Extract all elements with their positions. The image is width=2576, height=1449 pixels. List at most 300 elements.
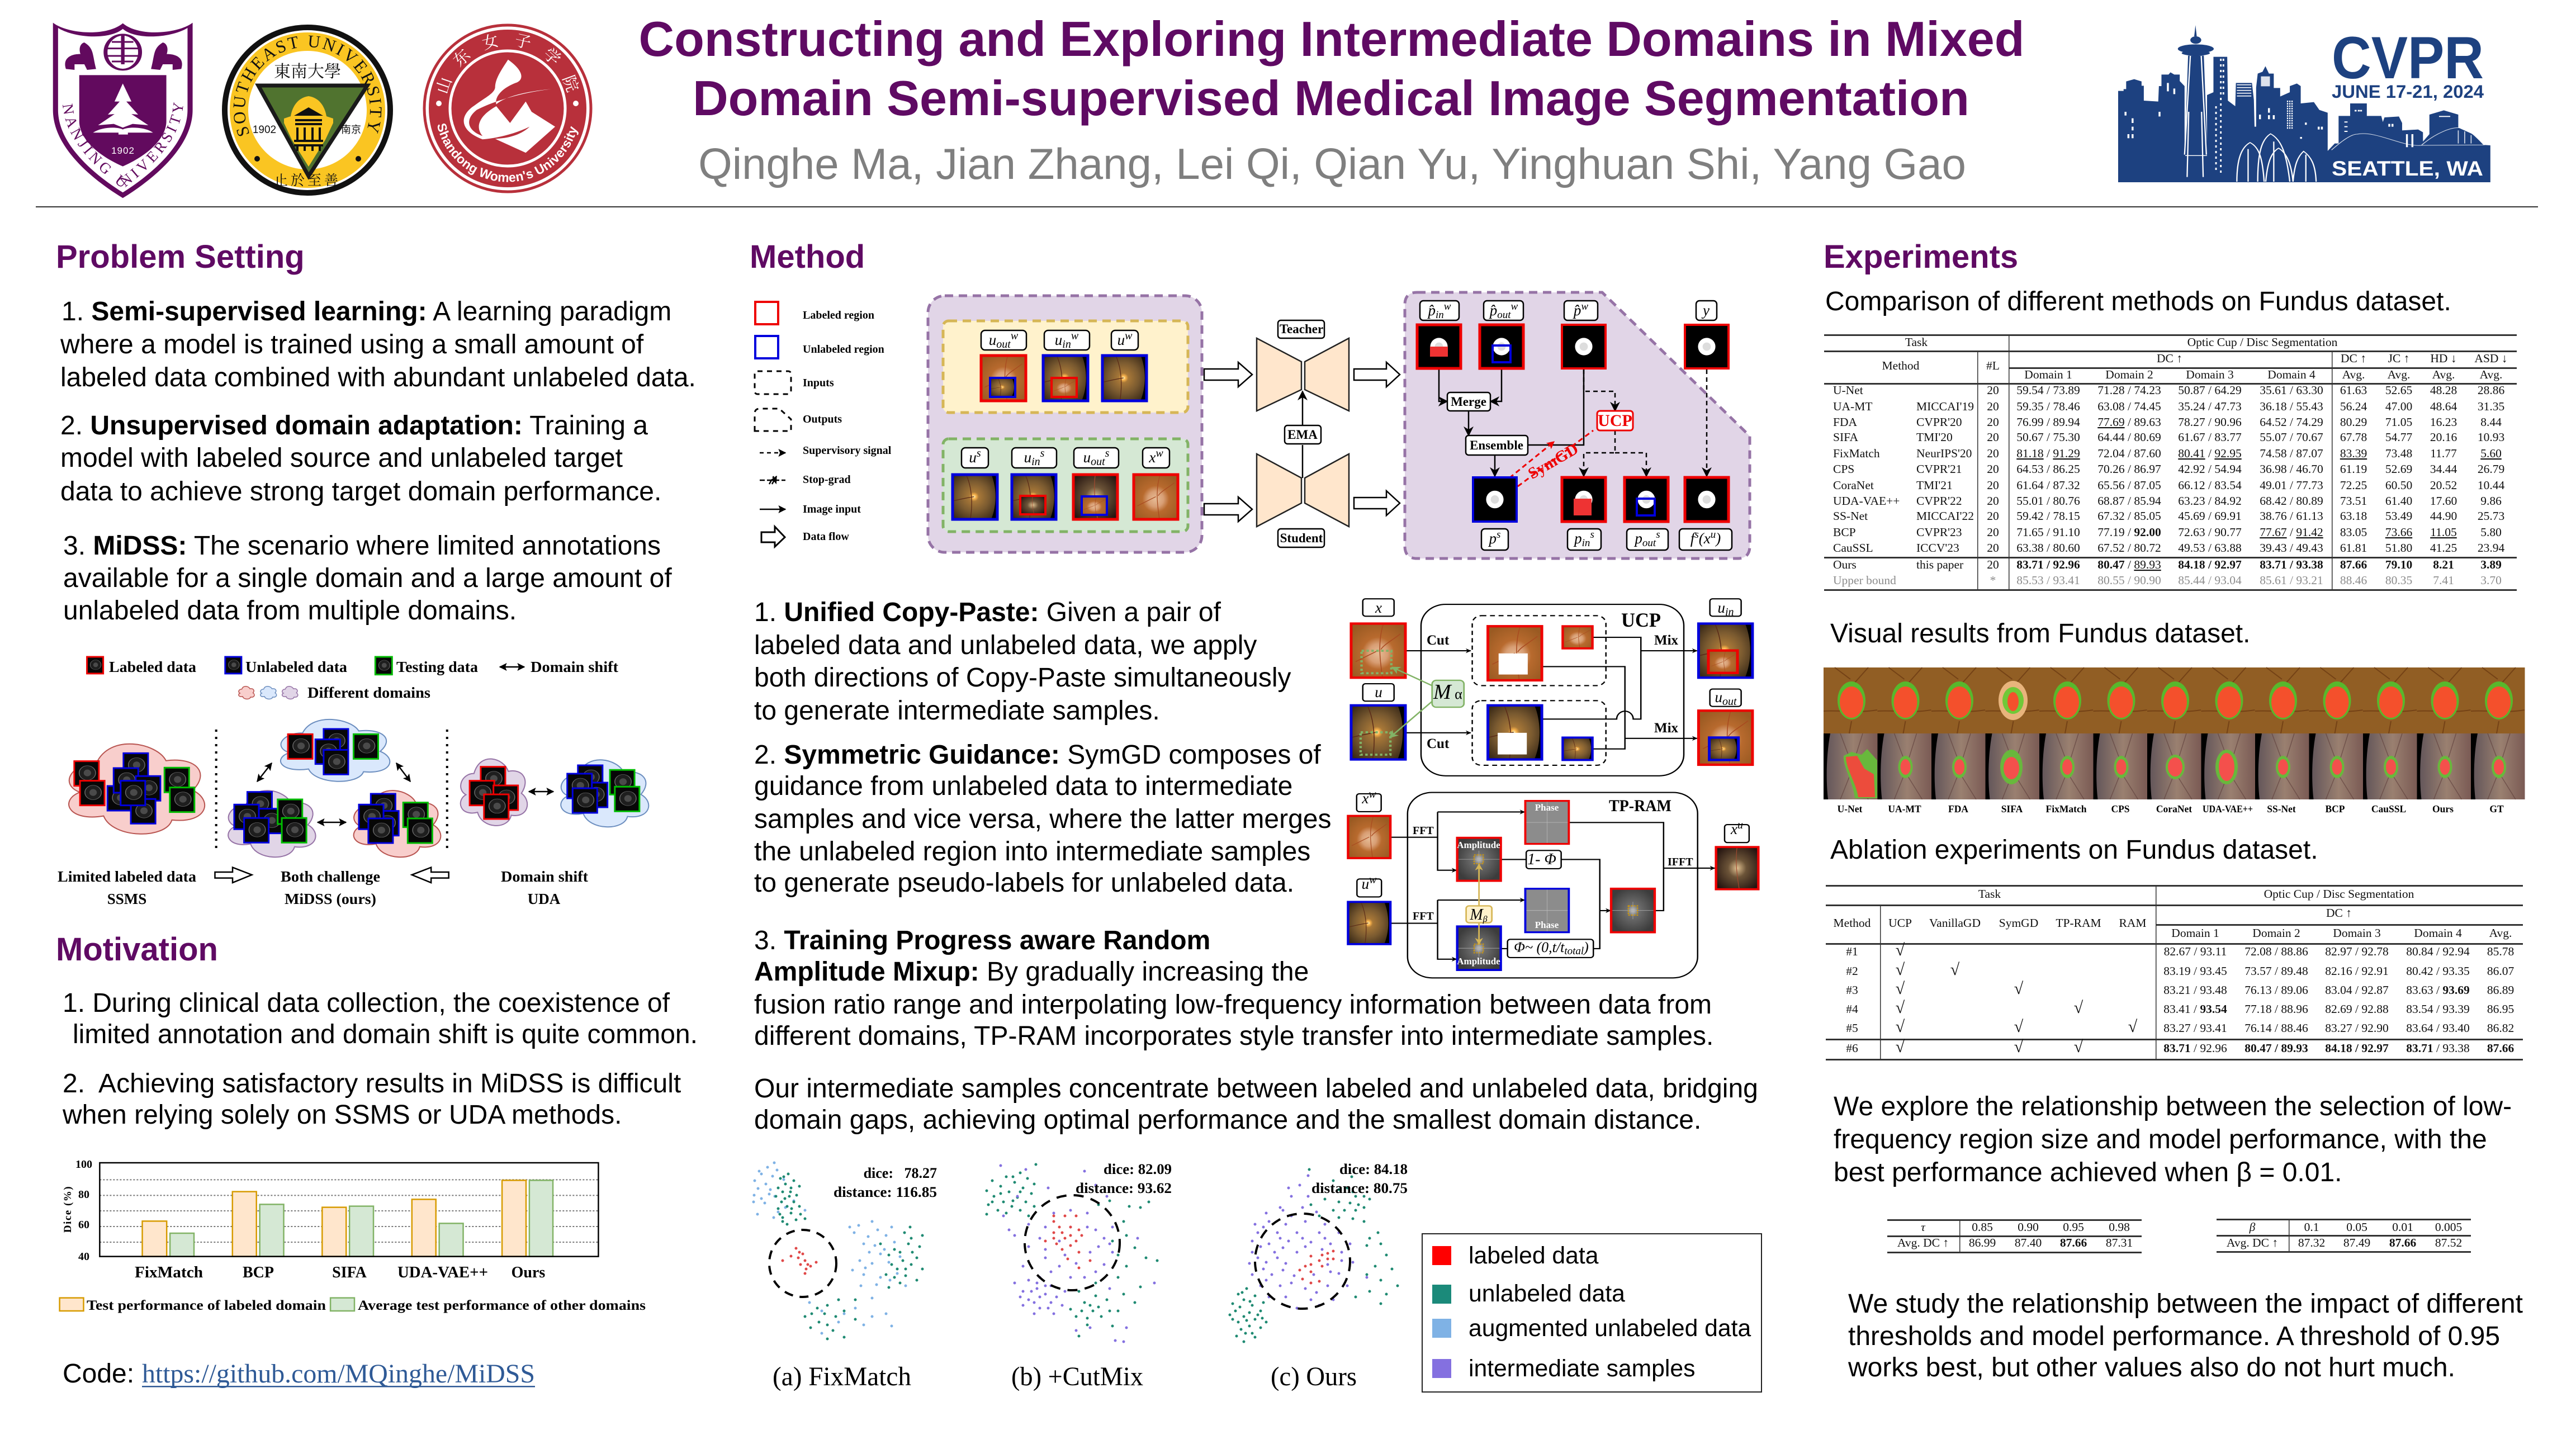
chart: t-SNE scatter plots: dice: 82.09 [1104, 1161, 1172, 1177]
title [639, 11, 2024, 126]
table: comparison of methods: 20 [1987, 400, 1999, 413]
diagram: TP-RAM: FFT [1413, 825, 1434, 837]
table: comparison of methods: 83.71 / 93.38 [2260, 558, 2323, 571]
text: intermediate samples summary: domain gaps, achieving optimal performance and the smallest domain distance. [754, 1105, 1701, 1135]
table: comparison of methods: 67.52 / 80.72 [2097, 541, 2161, 555]
logo: Shandong Women's University [423, 23, 593, 193]
bar chart: dice by method: Average test performance of other domains [358, 1298, 646, 1313]
captions: Limited labeled data [58, 868, 197, 885]
diagram: UCP: u [1717, 599, 1725, 616]
table: comparison of methods: 67.32 / 85.05 [2097, 509, 2161, 523]
legend: scatter [1422, 1234, 1761, 1392]
predictions bottom: ) [1715, 530, 1721, 547]
strong augmented images: u [969, 449, 977, 466]
table: comparison of methods: 10.44 [2478, 479, 2504, 492]
heading: Experiments: Experiments [1824, 239, 2018, 275]
table: comparison of methods: 80.41 / 92.95 [2178, 447, 2242, 460]
predictions top: p̂ [1490, 302, 1497, 319]
table: comparison of methods: 65.56 / 87.05 [2097, 479, 2161, 492]
table: comparison of methods: #L [1986, 359, 2000, 372]
table: comparison of methods: 70.26 / 86.97 [2097, 462, 2161, 476]
captions: MiDSS (ours) [285, 891, 376, 907]
table: comparison of methods: Upper bound [1833, 574, 1896, 587]
table: ablation experiments: √ [2014, 1038, 2024, 1056]
legend: data types: Different domains [307, 684, 430, 701]
legend: scatter: labeled data [1469, 1242, 1599, 1269]
table: comparison of methods: 49.53 / 63.88 [2178, 541, 2242, 555]
legend: method figure [755, 302, 892, 547]
table: comparison of methods: 48.64 [2430, 400, 2457, 413]
table: comparison of methods: CVPR'23 [1916, 525, 1962, 539]
bar chart: dice by method [60, 1158, 646, 1313]
diagram: UCP: Mix [1654, 633, 1679, 648]
diagram: TP-RAM: x [1362, 790, 1368, 807]
table: ablation experiments: RAM [2119, 916, 2146, 930]
table: comparison of methods: 11.77 [2430, 447, 2457, 460]
predictions bottom: p [1574, 530, 1582, 547]
table: ablation experiments: 83.19 / 93.45 [2163, 964, 2227, 978]
table: comparison of methods: CVPR'21 [1916, 462, 1962, 476]
predictions top: in [1436, 309, 1444, 321]
table: comparison of methods: 80.47 / 89.93 [2097, 558, 2161, 571]
text: MiDSS [63, 531, 672, 626]
table: comparison of methods: 8.44 [2480, 415, 2502, 429]
table: comparison of methods: 80.29 [2340, 415, 2367, 429]
table: comparison of methods: HD ↓ [2430, 352, 2457, 365]
table: comparison of methods: 20.52 [2430, 479, 2457, 492]
chart: t-SNE scatter plots [754, 1161, 1761, 1392]
table: beta sensitivity [2217, 1219, 2471, 1253]
scatter (a) FixMatch [754, 1163, 922, 1339]
diagram: TP-RAM: total [1564, 945, 1584, 957]
image strip: segmentation results: FixMatch [2046, 803, 2087, 815]
text: unsupervised domain adaptation: model with labeled source and unlabeled target [60, 443, 623, 473]
table: comparison of methods: 63.23 / 84.92 [2178, 494, 2242, 508]
table: comparison of methods: 20 [1987, 558, 1999, 571]
table: comparison of methods: 85.44 / 93.04 [2178, 574, 2242, 587]
table: ablation experiments: 73.57 / 89.48 [2244, 964, 2308, 978]
text: motivation points: 2. Achieving satisfactory results in MiDSS is difficult [63, 1069, 681, 1098]
domain shift arrows [257, 667, 553, 822]
table: comparison of methods: 52.69 [2385, 462, 2412, 476]
table: comparison of methods: 20 [1987, 383, 1999, 397]
text: TP-RAM [754, 926, 1713, 1051]
table: comparison of methods: NeurIPS'20 [1916, 447, 1972, 460]
table: comparison of methods: TMI'21 [1916, 479, 1953, 492]
teacher and student networks [1204, 320, 1400, 547]
text: unified copy-paste: labeled data and unlabeled data, we apply [754, 631, 1257, 660]
table: comparison of methods: ASD ↓ [2474, 352, 2508, 365]
table: beta sensitivity: 87.32 [2298, 1236, 2325, 1249]
table: comparison of methods: 31.35 [2478, 400, 2504, 413]
table: comparison of methods: 53.49 [2385, 509, 2412, 523]
diagram: TP-RAM: w [1369, 874, 1377, 886]
heading: Method: Method [750, 239, 865, 275]
weak augmented images: u [1055, 332, 1062, 348]
legend: data types: Domain shift [531, 659, 618, 675]
table: ablation experiments: √ [2074, 998, 2083, 1017]
table: comparison of methods: 36.98 / 46.70 [2260, 462, 2323, 476]
predictions bottom [1472, 476, 1732, 550]
table: comparison of methods: 59.42 / 78.15 [2016, 509, 2080, 523]
table: ablation experiments: Domain 1 [2171, 926, 2219, 940]
table: comparison of methods: FixMatch [1833, 447, 1880, 460]
strong augmented images: s [977, 447, 981, 460]
text: symmetric guidance: guidance from unlabeled data to intermediate [754, 771, 1292, 801]
text: symmetric guidance: to generate pseudo-labels for unlabeled data. [754, 868, 1294, 898]
diagram: TP-RAM: Amplitude [1457, 840, 1500, 850]
chart: t-SNE scatter plots: dice: 78.27 [864, 1165, 937, 1181]
table: ablation experiments: 86.07 [2487, 964, 2514, 978]
captions: UDA [528, 891, 561, 907]
merge, ensemble, UCP boxes: UCP [1598, 411, 1632, 430]
table: comparison of methods: 76.99 / 89.94 [2016, 415, 2080, 429]
table: comparison of methods: 20 [1987, 430, 1999, 444]
image strip: segmentation results: BCP [2326, 803, 2345, 815]
table: ablation experiments: √ [2014, 1017, 2024, 1036]
captions: SSMS [107, 891, 146, 907]
text: symmetric guidance: the unlabeled region into intermediate samples [754, 837, 1310, 866]
logo: Southeast University: 南京 [341, 122, 361, 136]
table: comparison of methods: 11.05 [2430, 525, 2457, 539]
table: tau sensitivity: 0.90 [2018, 1220, 2039, 1234]
text: unified copy-paste: to generate intermediate samples. [754, 696, 1160, 726]
diagram: TP-RAM: IFFT [1668, 856, 1693, 868]
table: comparison of methods: 20 [1987, 494, 1999, 508]
table: comparison of methods: 85.61 / 93.21 [2260, 574, 2323, 587]
captions: Domain shift [501, 868, 588, 885]
captions [58, 868, 588, 907]
image strip: segmentation results: SIFA [2001, 803, 2023, 815]
text: unified copy-paste [754, 598, 1291, 726]
image strip: segmentation results: CPS [2111, 803, 2130, 815]
diagram: UCP [1350, 599, 1754, 776]
diagram: UCP: in [1725, 606, 1734, 618]
table: comparison of methods: 23.94 [2478, 541, 2504, 555]
table: comparison of methods: 48.28 [2430, 383, 2457, 397]
table: comparison of methods: 61.81 [2340, 541, 2367, 555]
text: semi-supervised learning [60, 297, 696, 392]
table: ablation experiments: 86.89 [2487, 983, 2514, 997]
bar chart: dice by method: 40 [78, 1251, 89, 1263]
weak augmented images: out [996, 338, 1011, 351]
predictions top: p̂ [1574, 302, 1581, 319]
table: comparison of methods: 72.25 [2340, 479, 2367, 492]
table: tau sensitivity: 0.98 [2109, 1220, 2130, 1234]
table: ablation experiments: 82.69 / 92.88 [2325, 1002, 2389, 1016]
text: threshold relationship: We study the relationship between the impact of different [1848, 1289, 2523, 1319]
table: ablation experiments: 72.08 / 88.86 [2244, 945, 2308, 958]
table: comparison of methods: CVPR'22 [1916, 494, 1962, 508]
merge, ensemble, UCP boxes: Ensemble [1470, 438, 1523, 452]
text: TP-RAM: different domains, TP-RAM incorporates style transfer into intermediate samples. [754, 1021, 1713, 1051]
panel: motivation [56, 931, 698, 1389]
table: comparison of methods: * [1990, 574, 1996, 587]
table: ablation experiments: 83.04 / 92.87 [2325, 983, 2389, 997]
image strip: segmentation results: Ours [2432, 803, 2454, 815]
table: comparison of methods: 83.05 [2340, 525, 2367, 539]
teacher and student networks: EMA [1287, 428, 1318, 442]
table: comparison of methods: 9.86 [2480, 494, 2502, 508]
table: comparison of methods: 61.67 / 83.77 [2178, 430, 2242, 444]
diagram: UCP: Mix [1654, 721, 1679, 736]
table: tau sensitivity: 86.99 [1969, 1236, 1996, 1249]
table: comparison of methods: Avg. [2432, 368, 2455, 381]
table: ablation experiments: 83.63 / 93.69 [2406, 983, 2470, 997]
text: MiDSS: available for a single domain and a large amount of [63, 564, 672, 593]
legend: scatter: unlabeled data [1469, 1280, 1625, 1307]
table: comparison of methods: MICCAI'19 [1916, 400, 1974, 413]
table: comparison of methods: 5.60 [2480, 447, 2502, 460]
strong augmented images: x [1149, 449, 1156, 466]
legend: method figure: Image input [803, 503, 861, 515]
text: unified copy-paste: both directions of Copy-Paste simultaneously [754, 663, 1291, 693]
table: comparison of methods: 20 [1987, 462, 1999, 476]
table: ablation experiments: SymGD [1999, 916, 2038, 930]
table: comparison of methods: 63.38 / 80.60 [2016, 541, 2080, 555]
table: comparison of methods: 7.41 [2433, 574, 2454, 587]
panel: outputs [1405, 292, 1750, 558]
table: ablation experiments: Domain 2 [2252, 926, 2300, 940]
weak augmented images: w [1011, 330, 1019, 342]
text: motivation points: 1. During clinical data collection, the coexistence of [63, 988, 670, 1018]
table: ablation experiments: Optic Cup / Disc Segmentation [2264, 887, 2414, 901]
bar chart: dice by method: Dice (%) [62, 1186, 74, 1233]
table: comparison of methods: 64.53 / 86.25 [2016, 462, 2080, 476]
table: comparison of methods: 54.77 [2385, 430, 2412, 444]
table: comparison of methods: 73.48 [2385, 447, 2412, 460]
table: comparison of methods: 83.39 [2340, 447, 2367, 460]
table: comparison of methods: DC ↑ [2157, 352, 2182, 365]
text: TP-RAM: 3. Training Progress aware Random [754, 926, 1210, 955]
text: beta relationship: frequency region size and model performance, with the [1834, 1125, 2487, 1154]
chart: t-SNE scatter plots: dice: 84.18 [1339, 1161, 1408, 1177]
table: ablation experiments: √ [1896, 979, 1905, 998]
predictions bottom: (x [1699, 530, 1711, 547]
table: comparison of methods: 85.53 / 93.41 [2016, 574, 2080, 587]
table: beta sensitivity: 87.66 [2389, 1236, 2416, 1249]
image strip: segmentation results: CoraNet [2156, 803, 2192, 815]
table: comparison of methods: 61.64 / 87.32 [2016, 479, 2080, 492]
diagram: TP-RAM: β [1483, 915, 1488, 924]
table: comparison of methods: 63.08 / 74.45 [2097, 400, 2161, 413]
bar chart: dice by method: 100 [75, 1158, 92, 1171]
connectors [1439, 370, 1707, 476]
caption: visual results: Visual results from Fundus dataset. [1830, 619, 2250, 648]
table: comparison of methods: UDA-VAE++ [1833, 494, 1900, 508]
logo: CVPR 2024 Seattle [2118, 24, 2490, 182]
table: ablation experiments: √ [1950, 960, 1960, 979]
table: beta sensitivity: 0.01 [2392, 1220, 2413, 1234]
diagram: TP-RAM: TP-RAM [1609, 797, 1671, 815]
table: ablation experiments: #5 [1846, 1021, 1858, 1035]
table: comparison of methods: FDA [1833, 415, 1857, 429]
heading: Motivation: Motivation [56, 931, 218, 968]
table: ablation experiments: Domain 4 [2414, 926, 2462, 940]
text: symmetric guidance: 2. Symmetric Guidance: SymGD composes of [754, 740, 1321, 770]
logo: Shandong Women's University: Shandong Women's University [437, 124, 579, 182]
table: ablation experiments: 83.27 / 92.90 [2325, 1021, 2389, 1035]
table: ablation experiments: 83.41 / 93.54 [2163, 1002, 2227, 1016]
legend: data types: Unlabeled data [245, 659, 348, 675]
table: tau sensitivity: 0.85 [1972, 1220, 1993, 1234]
diagram: TP-RAM: w [1368, 788, 1376, 801]
table: comparison of methods: 36.18 / 55.43 [2260, 400, 2323, 413]
weak augmented images: w [1125, 330, 1133, 342]
table: comparison of methods: 49.01 / 77.73 [2260, 479, 2323, 492]
text: MiDSS: unlabeled data from multiple domains. [63, 596, 517, 626]
table: ablation experiments: #4 [1846, 1002, 1858, 1016]
table: comparison of methods: 59.35 / 78.46 [2016, 400, 2080, 413]
table: comparison of methods: 73.66 [2385, 525, 2412, 539]
weak augmented images: in [1062, 338, 1071, 351]
predictions bottom: out [1642, 537, 1656, 549]
table: tau sensitivity [1887, 1219, 2142, 1253]
table: comparison of methods: 50.67 / 75.30 [2016, 430, 2080, 444]
table: comparison of methods: 60.50 [2385, 479, 2412, 492]
weak augmented images: w [1071, 330, 1079, 342]
table: ablation experiments: √ [1896, 1017, 1905, 1036]
table: comparison of methods: 71.65 / 91.10 [2016, 525, 2080, 539]
table: comparison of methods: 63.18 [2340, 509, 2367, 523]
predictions bottom: f [1690, 530, 1694, 547]
authors: Qinghe Ma, Jian Zhang, Lei Qi, Qian Yu, Yinghuan Shi, Yang Gao [698, 139, 1966, 188]
table: comparison of methods: 77.67 / 91.42 [2260, 525, 2323, 539]
predictions top: w [1581, 301, 1588, 312]
bar chart: dice by method: Test performance of labeled domain [87, 1298, 326, 1313]
table: comparison of methods: 16.23 [2430, 415, 2457, 429]
text: semi-supervised learning: labeled data combined with abundant unlabeled data. [60, 363, 696, 392]
predictions bottom: s [1694, 529, 1699, 541]
table: comparison of methods: 28.86 [2478, 383, 2504, 397]
table: comparison of methods: 83.71 / 92.96 [2016, 558, 2080, 571]
diagram: TP-RAM: u [1737, 819, 1743, 831]
logo: Nanjing University [53, 22, 193, 198]
legend: method figure: Data flow [803, 531, 849, 543]
diagram: UCP: Cut [1427, 633, 1450, 648]
table: comparison of methods: 10.93 [2478, 430, 2504, 444]
logo: Nanjing University: 1902 [111, 145, 135, 156]
text: intermediate samples summary [754, 1074, 1758, 1135]
text: beta relationship: We explore the relationship between the selection of low- [1834, 1092, 2512, 1121]
table: ablation experiments: UCP [1888, 916, 1912, 930]
legend: method figure: Inputs [803, 377, 834, 389]
bar chart: dice by method: BCP [243, 1264, 274, 1281]
table: ablation experiments: #1 [1846, 945, 1858, 958]
text: beta relationship: best performance achieved when β = 0.01. [1834, 1158, 2342, 1187]
table: comparison of methods: 44.90 [2430, 509, 2457, 523]
table: beta sensitivity: β [2249, 1220, 2256, 1234]
table: comparison of methods: 20 [1987, 479, 1999, 492]
table: comparison of methods: Domain 3 [2186, 368, 2234, 381]
diagram: UCP: out [1722, 695, 1737, 708]
table: comparison of methods: 61.40 [2385, 494, 2412, 508]
table: comparison of methods: TMI'20 [1916, 430, 1953, 444]
legend: method figure: Supervisory signal [803, 444, 892, 457]
legend: method figure: Unlabeled region [803, 343, 884, 356]
table: comparison of methods: 61.19 [2340, 462, 2367, 476]
table: comparison of methods: 34.44 [2430, 462, 2457, 476]
table: ablation experiments: 84.18 / 92.97 [2325, 1041, 2389, 1055]
code link: https://github.com/MQinghe/MiDSS [142, 1359, 535, 1389]
table: comparison of methods: 35.61 / 63.30 [2260, 383, 2323, 397]
table: tau sensitivity: τ [1921, 1220, 1926, 1234]
strong augmented images: w [1156, 447, 1163, 460]
table: ablation experiments: 83.21 / 93.48 [2163, 983, 2227, 997]
table: ablation experiments: 83.64 / 93.40 [2406, 1021, 2470, 1035]
table: ablation experiments: √ [1896, 941, 1905, 959]
table: beta sensitivity: Avg. DC ↑ [2227, 1236, 2278, 1249]
predictions bottom: p [1635, 530, 1642, 547]
table: comparison of methods: 77.19 / 92.00 [2097, 525, 2161, 539]
table: ablation experiments: 85.78 [2487, 945, 2514, 958]
table: comparison of methods: Domain 2 [2105, 368, 2153, 381]
table: comparison of methods: BCP [1833, 525, 1856, 539]
table: comparison of methods: 8.21 [2433, 558, 2454, 571]
logo: Southeast University [222, 25, 393, 196]
bar chart: dice by method: Ours [512, 1264, 545, 1281]
logo: Southeast University: 1902 [253, 124, 276, 136]
table: comparison of methods: 5.80 [2480, 525, 2502, 539]
table: comparison of methods: 26.79 [2478, 462, 2504, 476]
table: comparison of methods: Domain 1 [2024, 368, 2072, 381]
table: comparison of methods: Ours [1833, 558, 1857, 571]
text: motivation points: when relying solely on SSMS or UDA methods. [62, 1100, 622, 1130]
table: ablation experiments: √ [2014, 979, 2024, 998]
logo: Southeast University: 東南大學 [274, 58, 341, 82]
table: comparison of methods: 88.46 [2340, 574, 2367, 587]
table: ablation experiments: DC ↑ [2326, 906, 2352, 920]
text: MiDSS: 3. MiDSS: The scenario where limited annotations [63, 531, 661, 561]
table: comparison of methods: 74.58 / 87.07 [2260, 447, 2323, 460]
diagram: TP-RAM [1347, 788, 1759, 978]
predictions top: y [1701, 302, 1710, 319]
table: comparison of methods: Domain 4 [2267, 368, 2315, 381]
predictions bottom: p [1489, 530, 1497, 547]
table: comparison of methods: Optic Cup / Disc Segmentation [2187, 335, 2338, 349]
merge, ensemble, UCP boxes [1447, 392, 1633, 483]
diagram: UCP: u [1375, 684, 1382, 700]
diagram: TP-RAM: x [1731, 821, 1737, 837]
image strip: segmentation results: GT [2489, 803, 2504, 815]
title: Domain Semi-supervised Medical Image Segmentation [693, 70, 1969, 126]
table: ablation experiments: 87.66 [2487, 1041, 2514, 1055]
merge, ensemble, UCP boxes: SymGD [1525, 440, 1581, 483]
diagram: TP-RAM: ) [1583, 939, 1589, 955]
text: symmetric guidance [754, 740, 1331, 898]
table: ablation experiments: Method [1834, 916, 1871, 930]
strong augmented images: in [1031, 456, 1040, 468]
diagram: TP-RAM: Phase [1535, 802, 1559, 813]
table: comparison of methods: 38.76 / 61.13 [2260, 509, 2323, 523]
table: comparison of methods: 20 [1987, 447, 1999, 460]
table: comparison of methods: this paper [1916, 558, 1963, 571]
table: tau sensitivity: 0.95 [2063, 1220, 2084, 1234]
diagram: UCP: M α [1433, 680, 1462, 704]
text: TP-RAM: fusion ratio range and interpolating low-frequency information between data from [754, 990, 1712, 1020]
table: ablation experiments [1826, 885, 2523, 1060]
table: comparison of methods: 20 [1987, 509, 1999, 523]
text: unsupervised domain adaptation: data to achieve strong target domain performance. [60, 477, 661, 506]
table: ablation experiments: 80.47 / 89.93 [2244, 1041, 2308, 1055]
strong augmented images: s [1040, 447, 1045, 460]
table: comparison of methods: 68.42 / 80.89 [2260, 494, 2323, 508]
diagram: UCP: x [1375, 599, 1382, 616]
table: comparison of methods: 68.87 / 85.94 [2097, 494, 2161, 508]
diagram: UCP: Cut [1427, 736, 1450, 751]
table: ablation experiments: √ [1896, 998, 1905, 1017]
table: ablation experiments: 82.67 / 93.11 [2164, 945, 2227, 958]
